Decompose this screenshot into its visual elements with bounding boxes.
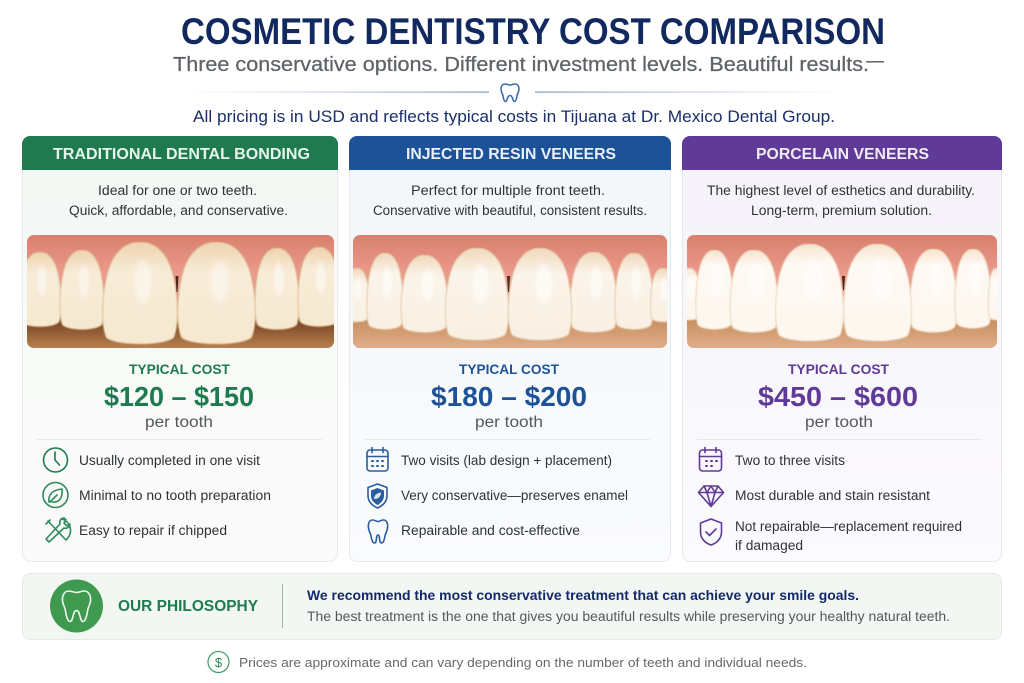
price block: porcelain <box>758 361 918 431</box>
benefit: not repairable shield <box>700 519 962 553</box>
header divider with tooth icon <box>184 84 847 102</box>
benefit: one visit <box>44 448 260 472</box>
description: porcelain <box>707 183 975 218</box>
benefit: preserves enamel <box>368 484 628 508</box>
price block: bonding: per tooth <box>145 414 213 431</box>
photo: porcelain veneers <box>678 235 1004 348</box>
card header: resin <box>349 136 671 170</box>
benefit: preserves enamel: Very conservative—preserves enamel <box>401 488 628 503</box>
philosophy label: OUR PHILOSOPHY <box>118 598 258 615</box>
price block: resin: per tooth <box>475 414 543 431</box>
benefit: not repairable shield: Not repairable—replacement required <box>735 519 962 534</box>
icon: tooth badge <box>50 580 103 632</box>
philosophy text: The best treatment is the one that gives you beautiful results while preserving your healthy natural teeth. <box>307 609 950 624</box>
footnote <box>208 652 807 672</box>
panel: injected resin veneers <box>344 136 674 562</box>
benefit: not repairable shield: if damaged <box>735 538 803 553</box>
panel: our philosophy <box>22 574 1002 640</box>
price block: porcelain: per tooth <box>805 414 873 431</box>
price block: porcelain: TYPICAL COST <box>788 361 889 377</box>
price block: porcelain: $450 – $600 <box>758 381 918 412</box>
footnote: Prices are approximate and can vary depending on the number of teeth and individual needs. <box>239 655 807 670</box>
panel: porcelain veneers <box>678 136 1004 562</box>
benefit: minimal preparation <box>43 482 271 508</box>
description: resin <box>373 183 647 218</box>
panel: traditional dental bonding <box>19 136 340 562</box>
description: bonding: Ideal for one or two teeth. <box>98 183 257 198</box>
description: resin: Perfect for multiple front teeth. <box>411 183 605 198</box>
photo: bonded teeth <box>19 235 340 348</box>
benefit: repairable: Repairable and cost-effective <box>401 523 580 538</box>
benefit: minimal preparation: Minimal to no tooth preparation <box>79 488 271 503</box>
benefit: three visits: Two to three visits <box>735 453 845 468</box>
benefit: easy repair: Easy to repair if chipped <box>79 523 227 538</box>
description: bonding <box>69 183 288 218</box>
description: porcelain: Long-term, premium solution. <box>751 203 932 218</box>
card header: resin: INJECTED RESIN VENEERS <box>406 146 616 163</box>
benefit: durable diamond: Most durable and stain resistant <box>735 488 930 503</box>
benefit: two visits <box>367 448 612 471</box>
price block: bonding <box>104 361 254 431</box>
philosophy text <box>307 587 950 624</box>
card header: bonding: TRADITIONAL DENTAL BONDING <box>53 146 310 163</box>
benefit: durable diamond <box>698 486 930 506</box>
benefit: easy repair <box>46 518 227 542</box>
philosophy text: We recommend the most conservative treatment that can achieve your smile goals. <box>307 587 859 603</box>
description: bonding: Quick, affordable, and conservative. <box>69 203 288 218</box>
price block: bonding: TYPICAL COST <box>129 361 230 377</box>
benefit: three visits <box>700 448 845 471</box>
card header: porcelain <box>682 136 1002 170</box>
description: porcelain: The highest level of esthetics and durability. <box>707 183 975 198</box>
benefit: repairable <box>368 520 580 543</box>
benefit: one visit: Usually completed in one visit <box>79 453 260 468</box>
card header: bonding <box>22 136 338 170</box>
price block: resin: $180 – $200 <box>431 381 587 412</box>
subtitle: Three conservative options. Different investment levels. Beautiful results. <box>173 54 869 76</box>
benefit: two visits: Two visits (lab design + placement) <box>401 453 612 468</box>
title: COSMETIC DENTISTRY COST COMPARISON <box>181 11 885 52</box>
price block: bonding: $120 – $150 <box>104 381 254 412</box>
card header: porcelain: PORCELAIN VENEERS <box>756 146 929 163</box>
photo: resin veneers <box>344 235 674 348</box>
footnote: $ <box>215 655 223 670</box>
pricing note: All pricing is in USD and reflects typical costs in Tijuana at Dr. Mexico Dental Group. <box>193 108 835 126</box>
description: resin: Conservative with beautiful, consistent results. <box>373 203 647 218</box>
price block: resin <box>431 361 587 431</box>
price block: resin: TYPICAL COST <box>459 361 559 377</box>
